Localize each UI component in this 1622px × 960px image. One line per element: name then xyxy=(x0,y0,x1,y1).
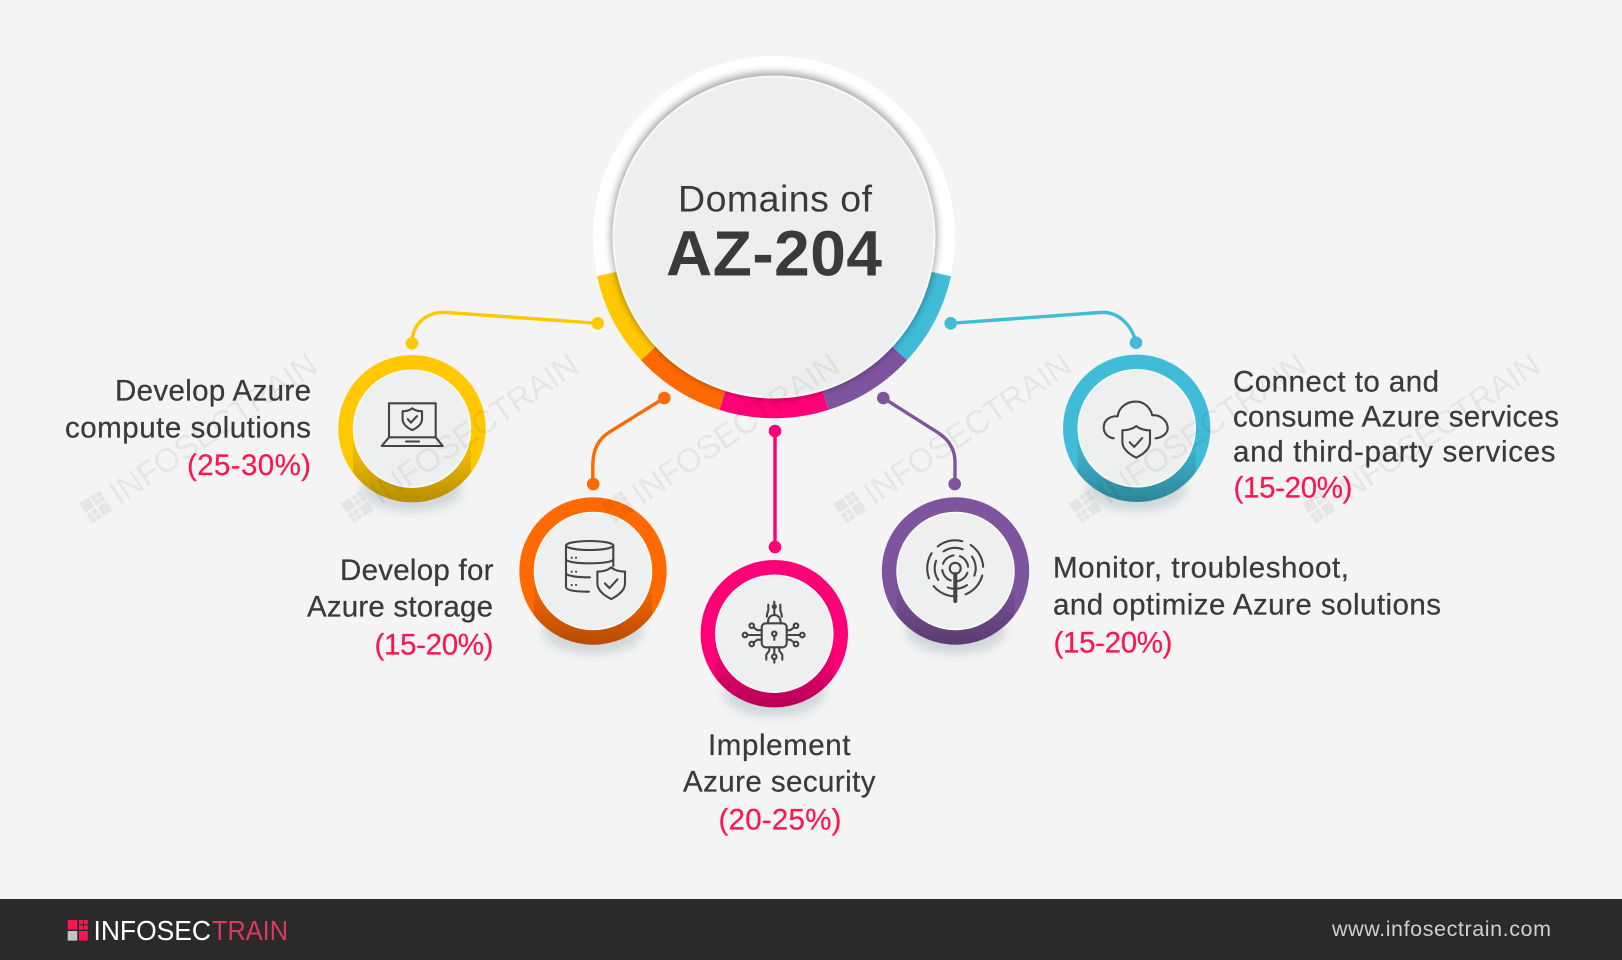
label: storage xyxy=(307,554,494,661)
label: connect: and third-party services xyxy=(1233,436,1556,469)
icon: laptop with shield xyxy=(382,403,443,446)
label: security xyxy=(683,729,876,836)
ring segment: yellow xyxy=(607,274,648,353)
connector: purple xyxy=(877,392,961,490)
label: connect: (15-20%) xyxy=(1234,472,1352,505)
label: connect xyxy=(1233,366,1559,505)
watermark 3: INFOSECTRAIN xyxy=(625,346,846,512)
label: storage: Azure storage xyxy=(307,591,493,624)
label: storage: Develop for xyxy=(340,554,494,587)
connector: yellow xyxy=(406,312,604,350)
central disc xyxy=(614,76,934,398)
label: storage: (15-20%) xyxy=(374,628,494,661)
label: monitor xyxy=(1053,552,1441,659)
connector: teal xyxy=(944,312,1142,349)
footer bar xyxy=(0,899,1622,960)
label: compute solutions: Develop Azure xyxy=(115,375,311,408)
watermark 5: INFOSECTRAIN xyxy=(1092,346,1313,512)
logo mark xyxy=(68,920,88,941)
website URL: www.infosectrain.com xyxy=(1331,917,1551,941)
label: security: Implement xyxy=(708,729,850,762)
icon: database with shield xyxy=(566,541,625,599)
footer bar: TRAIN xyxy=(212,915,288,946)
badge: yellow laptop xyxy=(338,355,486,512)
watermark 1: INFOSECTRAIN xyxy=(103,346,324,512)
label: compute solutions xyxy=(65,375,311,482)
label: monitor: Monitor, troubleshoot, xyxy=(1053,552,1349,585)
badge: teal cloud xyxy=(1063,355,1210,511)
ring segment: teal xyxy=(900,274,941,353)
watermark 6: INFOSECTRAIN xyxy=(1326,346,1547,512)
label: connect: Connect to and xyxy=(1233,366,1439,399)
badge: purple signal xyxy=(882,497,1029,654)
heading: Domains of: Domains of xyxy=(678,178,873,220)
badge: pink circuit lock xyxy=(701,560,848,717)
label: compute solutions: compute solutions xyxy=(65,411,311,444)
ring segment: purple xyxy=(825,353,900,400)
badge: orange database xyxy=(519,497,667,654)
icon: circuit lock xyxy=(743,602,805,663)
central circle xyxy=(593,56,955,418)
icon: signal tower xyxy=(921,534,989,603)
label: monitor: (15-20%) xyxy=(1054,626,1172,659)
label: compute solutions: (25-30%) xyxy=(187,449,311,482)
watermark 4: INFOSECTRAIN xyxy=(857,346,1078,512)
connector: pink xyxy=(769,425,781,553)
logo wordmark: INFOSEC xyxy=(94,915,211,946)
heading: AZ-204: AZ-204 xyxy=(666,218,882,290)
label: monitor: and optimize Azure solutions xyxy=(1053,588,1441,621)
label: security: (20-25%) xyxy=(718,803,842,836)
watermark 2: INFOSECTRAIN xyxy=(364,346,585,512)
connector: orange xyxy=(587,392,671,490)
label: security: Azure security xyxy=(683,766,876,799)
ring segment: pink xyxy=(723,400,825,408)
ring segment: orange xyxy=(648,353,723,400)
label: connect: consume Azure services xyxy=(1233,401,1559,434)
icon: cloud with shield xyxy=(1104,402,1168,458)
